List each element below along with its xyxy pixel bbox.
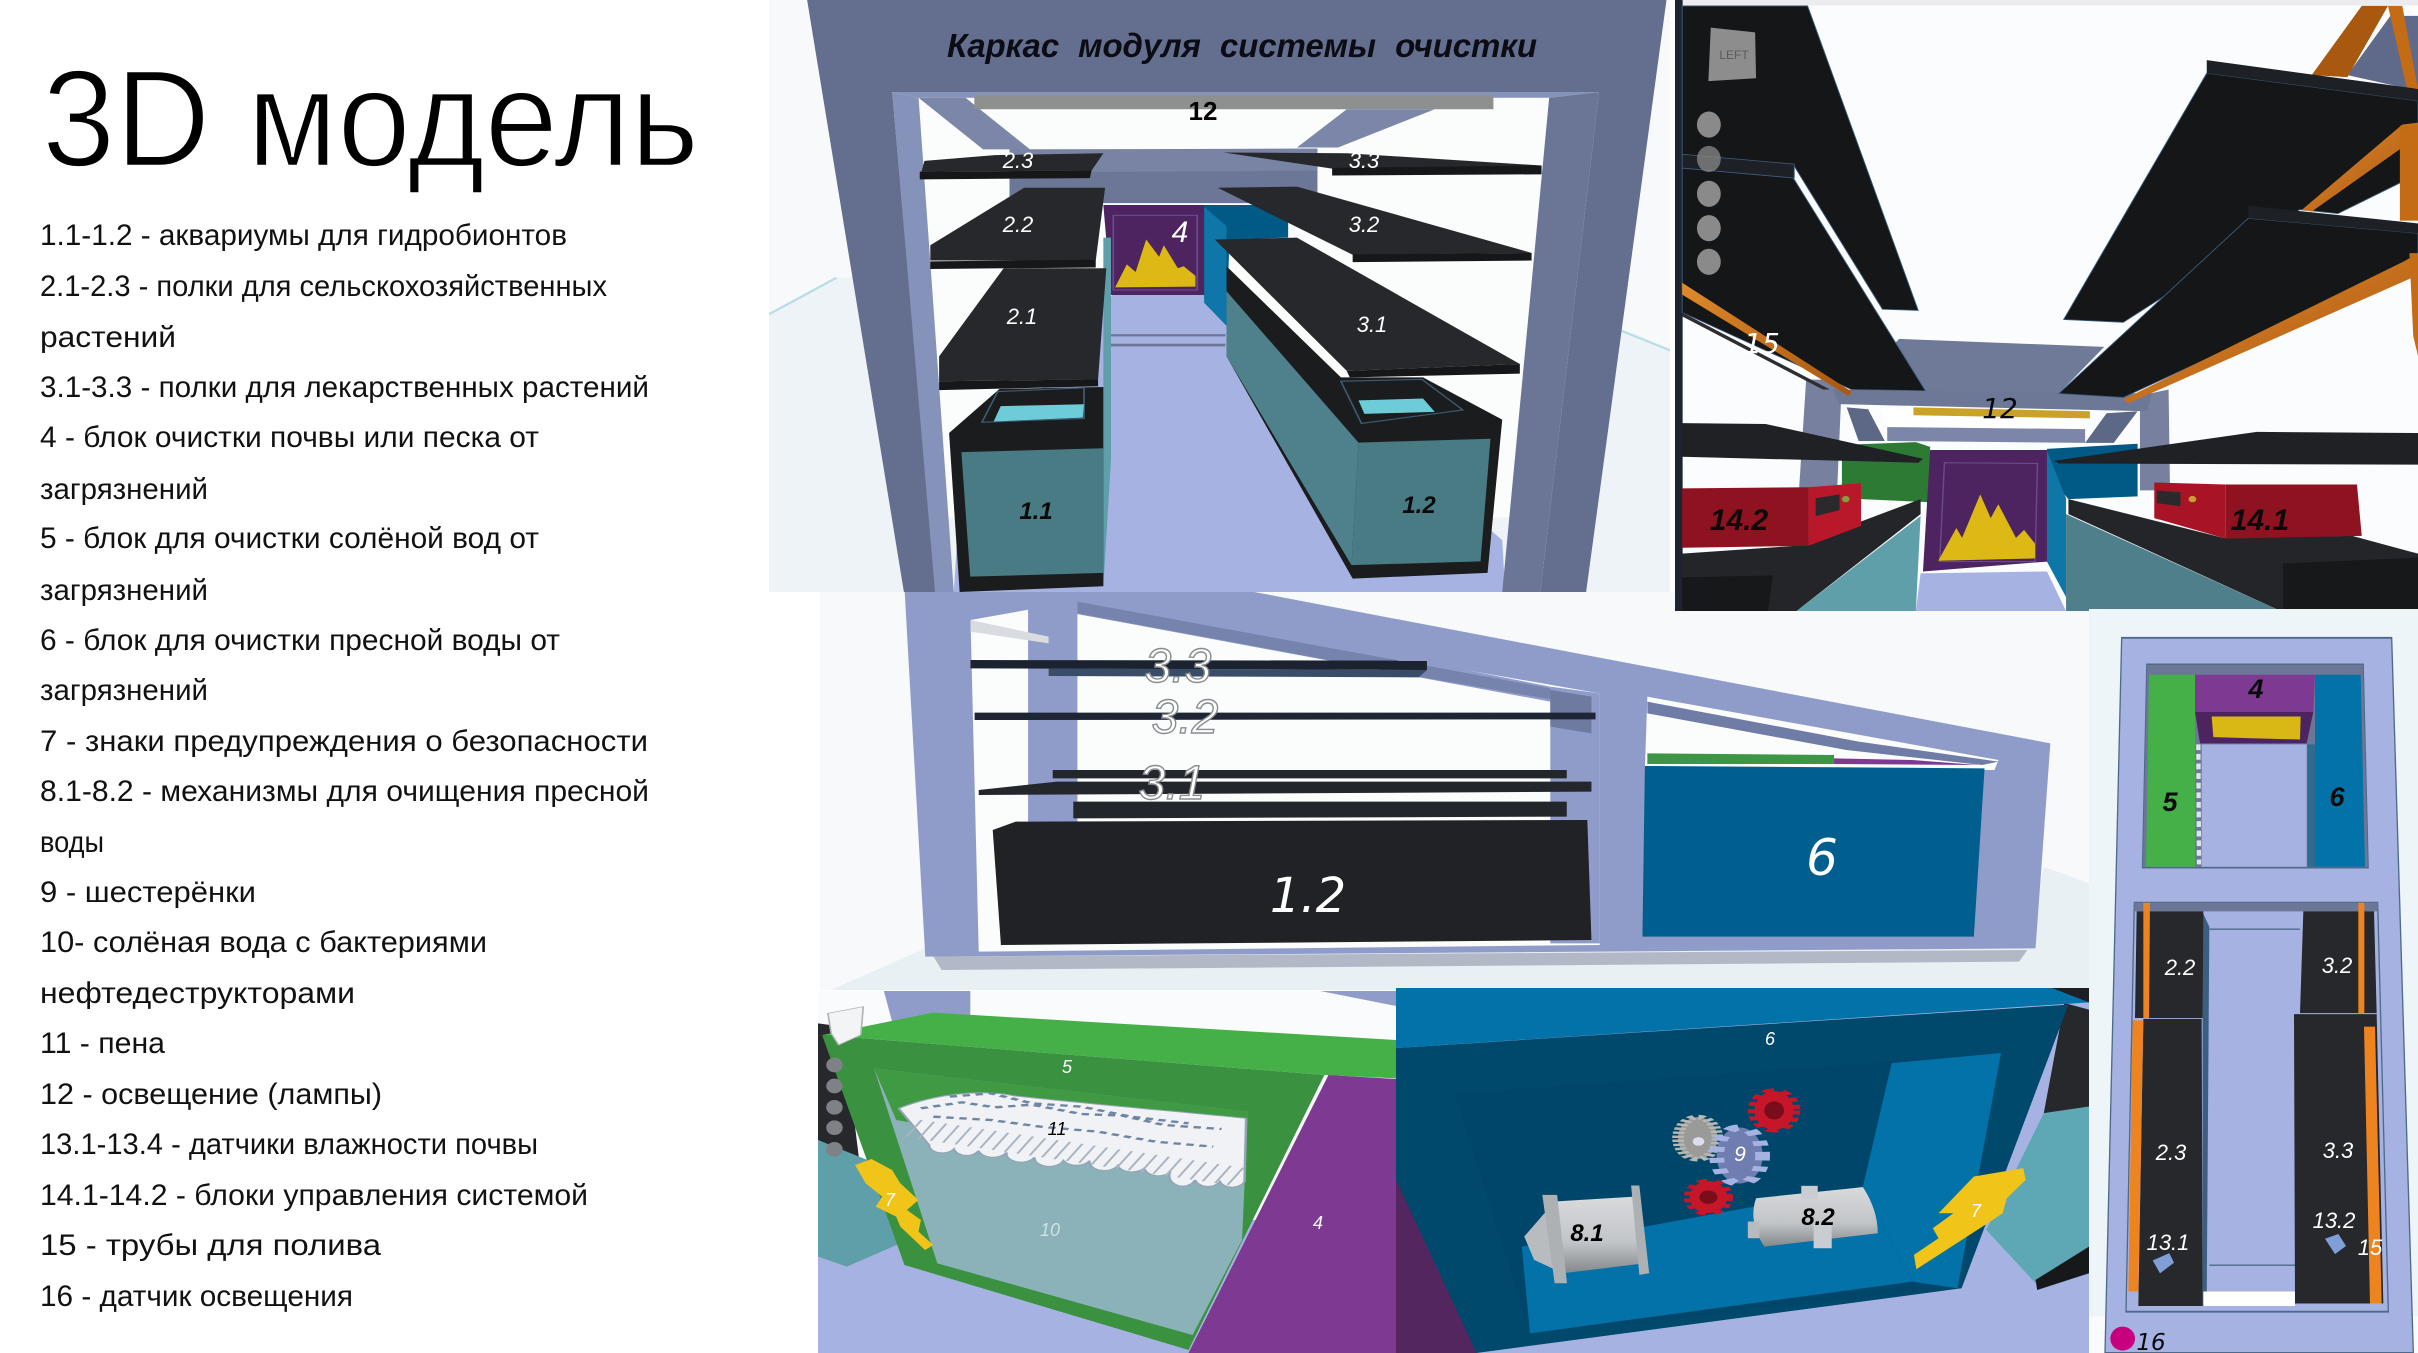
outlined labels 3.1-3.3: 3.2	[1152, 691, 1218, 744]
legend text block: 11 - пена	[40, 1027, 165, 1060]
panel: block 5 salt water	[818, 991, 1396, 1353]
labels	[885, 1057, 1323, 1240]
labels on shelves: 3.3	[2323, 1138, 2354, 1163]
shelf labels	[1002, 148, 1387, 337]
aquarium labels: 1.1	[1019, 498, 1053, 525]
labels on shelves: 13.2	[2313, 1208, 2355, 1233]
legend text block: 14.1-14.2 - блоки управления системой	[40, 1179, 588, 1212]
legend text block: воды	[40, 826, 104, 859]
label 6: 6	[1806, 829, 1838, 887]
labels on shelves: 15	[2358, 1235, 2383, 1260]
frame	[807, 0, 1666, 592]
back frame	[1799, 339, 2170, 490]
labels on shelves	[2147, 953, 2383, 1260]
blue block	[2047, 444, 2138, 597]
labels: 10	[1040, 1220, 1060, 1240]
legend text block: загрязнений	[40, 473, 208, 506]
label 1.2: 1.2	[1270, 868, 1346, 924]
labels white: 6	[1765, 1029, 1776, 1049]
foam 11	[899, 1093, 1246, 1187]
panel: view from below	[1675, 0, 2418, 611]
warning sign 7	[855, 1159, 933, 1250]
labels: 4	[1313, 1213, 1323, 1233]
gears 9	[1678, 1091, 1794, 1213]
labels white: 9	[1734, 1143, 1746, 1166]
control unit 14.2	[1682, 483, 1861, 548]
blue block body	[1396, 988, 2089, 1353]
legend text block: 6 - блок для очистки пресной воды от	[40, 624, 560, 657]
frame body	[905, 592, 2050, 957]
lower shelves	[1682, 423, 2418, 465]
labels on blocks	[2162, 674, 2345, 817]
upper right shelves	[2059, 60, 2418, 403]
upper left shelves	[1682, 6, 1925, 396]
outlined labels 3.1-3.3: 3.3	[1145, 640, 1212, 693]
labels: 11	[1048, 1119, 1066, 1139]
aquarium labels	[1019, 492, 1436, 525]
panel: block 6 fresh water	[1396, 988, 2089, 1353]
shelves 3.1-3.3	[1215, 153, 1542, 377]
labels white	[1734, 1029, 1982, 1221]
labels: 5	[1062, 1057, 1073, 1077]
purple block	[1189, 1075, 1396, 1353]
legend text block: нефтедеструкторами	[40, 977, 355, 1010]
unit labels	[1710, 504, 2289, 537]
aquarium labels: 1.2	[1402, 492, 1436, 519]
lower window	[2126, 903, 2388, 1312]
legend text block: 16 - датчик освещения	[40, 1280, 353, 1313]
labels on blocks: 4	[2247, 674, 2264, 704]
label 12: 12	[1189, 96, 1217, 126]
inner chamber	[1454, 1053, 2001, 1333]
legend text block: 4 - блок очистки почвы или песка от	[40, 421, 539, 454]
legend text block: загрязнений	[40, 574, 208, 607]
panel: top view	[2089, 609, 2418, 1353]
aquarium 1.2 side	[993, 820, 1591, 945]
shelf labels: 3.2	[1349, 212, 1379, 237]
labels white: 7	[1971, 1201, 1982, 1221]
green block	[1842, 442, 1930, 502]
irrigation pipes	[2128, 903, 2382, 1304]
view cube	[1708, 28, 1756, 81]
upper window	[2142, 664, 2368, 868]
block 6 blue	[1204, 205, 1288, 326]
view buttons	[826, 1058, 843, 1157]
labels on shelves: 2.3	[2155, 1140, 2187, 1165]
labels on blocks: 5	[2162, 787, 2178, 817]
labels on blocks: 6	[2329, 782, 2345, 812]
water 10	[874, 1068, 1248, 1335]
legend text block: растений	[40, 321, 176, 354]
legend text block: 10- солёная вода с бактериями	[40, 926, 487, 959]
orange pipes top right	[2312, 6, 2418, 91]
warning sign 7	[1914, 1168, 2026, 1269]
outlined labels 3.1-3.3	[1139, 640, 1218, 810]
heading: frame caption: Каркас модуля системы очистки	[947, 27, 1537, 64]
shelves 3.1-3.3	[971, 660, 1596, 818]
legend text block: 2.1-2.3 - полки для сельскохозяйственных	[40, 270, 607, 303]
unit labels: 14.1	[2231, 504, 2289, 537]
shelf labels: 4	[1172, 216, 1188, 249]
block 6 side	[1642, 702, 1999, 937]
labels mechanisms	[1570, 1204, 1835, 1247]
label 15: 15	[1744, 327, 1780, 360]
soil sensors	[2153, 1234, 2346, 1273]
legend text block: 12 - освещение (лампы)	[40, 1078, 382, 1111]
shelf labels: 2.1	[1006, 304, 1037, 329]
labels: 7	[885, 1190, 896, 1210]
panel: front view of the frame	[769, 0, 1680, 592]
shelf labels: 3.1	[1357, 312, 1387, 337]
green block body	[822, 1013, 1396, 1350]
legend text block: загрязнений	[40, 674, 208, 707]
right aquarium	[2066, 499, 2418, 611]
shelves 2.1-2.3	[920, 153, 1106, 390]
label LEFT: LEFT	[1719, 48, 1749, 62]
left aquarium	[1682, 499, 1921, 611]
purple block with soil	[1923, 450, 2047, 571]
labels on shelves: 3.2	[2322, 953, 2352, 978]
legend text block: 13.1-13.4 - датчики влажности почвы	[40, 1128, 538, 1161]
labels mechanisms: 8.2	[1801, 1204, 1835, 1231]
panel: side view	[820, 592, 2089, 990]
aquarium 1.2	[1227, 266, 1502, 579]
mechanism 8.1	[1524, 1186, 1649, 1283]
mechanism 8.2	[1748, 1186, 1878, 1248]
legend text block: 3.1-3.3 - полки для лекарственных растений	[40, 371, 649, 404]
legend text block: 7 - знаки предупреждения о безопасности	[40, 725, 648, 758]
outlined labels 3.1-3.3: 3.1	[1139, 757, 1205, 810]
shelf labels: 2.3	[1002, 148, 1034, 173]
block 4 purple	[1103, 205, 1206, 295]
labels on shelves: 13.1	[2147, 1230, 2189, 1255]
legend text block: 1.1-1.2 - аквариумы для гидробионтов	[40, 219, 567, 252]
shelf labels: 3.3	[1349, 148, 1380, 173]
legend text block: 8.1-8.2 - механизмы для очищения пресной	[40, 775, 649, 808]
legend text block	[40, 219, 649, 1313]
shelf labels: 2.2	[1002, 212, 1033, 237]
view buttons	[1697, 112, 1721, 275]
label 12: 12	[1982, 392, 2018, 425]
lamp 12	[974, 95, 1493, 109]
light sensor 16	[2110, 1327, 2135, 1351]
labels mechanisms: 8.1	[1570, 1220, 1604, 1247]
unit labels: 14.2	[1710, 504, 1769, 537]
legend text block: 15 - трубы для полива	[40, 1229, 381, 1262]
aquarium 1.1	[949, 238, 1111, 592]
labels on shelves: 2.2	[2164, 955, 2195, 980]
legend text block: 5 - блок для очистки солёной вод от	[40, 522, 539, 555]
legend text block: 9 - шестерёнки	[40, 876, 256, 909]
title: 3D модель	[42, 42, 699, 196]
control unit 14.1	[2154, 482, 2362, 539]
